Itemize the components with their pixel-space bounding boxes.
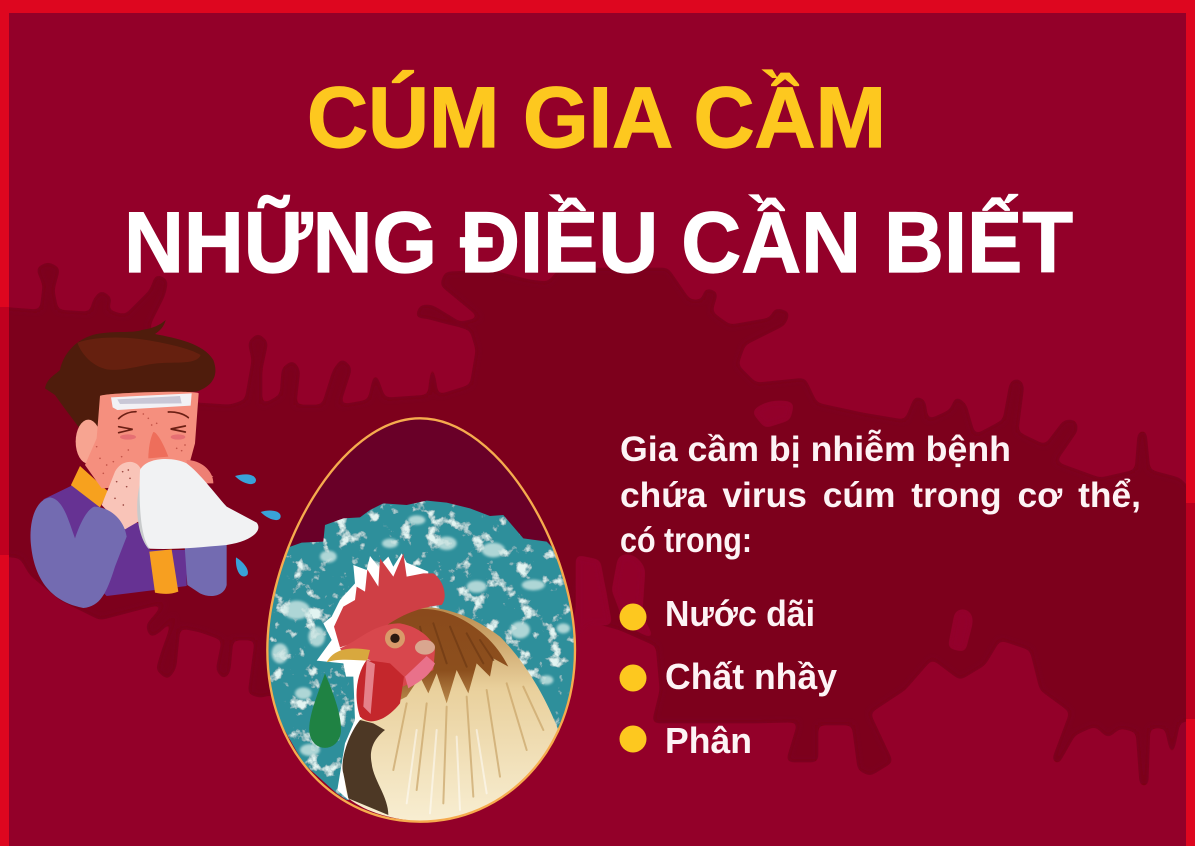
face	[85, 392, 213, 488]
bullet 3: Phân	[665, 720, 752, 761]
bullet dot 2	[620, 664, 646, 692]
eyebrows and closed eyes	[119, 412, 188, 433]
bullet 1: Nước dãi	[665, 593, 815, 634]
sneeze droplets	[235, 474, 281, 576]
rooster neck feathers	[380, 609, 508, 703]
bullet dot 3	[620, 726, 646, 752]
tissue shadow	[137, 483, 160, 549]
rooster chest feathers	[345, 607, 558, 822]
light lobes over dark virus	[576, 401, 973, 652]
eye	[385, 628, 405, 648]
tissue	[140, 459, 258, 549]
ear lobe	[405, 656, 435, 688]
bullet dot 1	[620, 604, 646, 630]
head	[340, 623, 435, 687]
intro line 3: có trong:	[620, 521, 752, 560]
egg border	[267, 418, 575, 822]
title line 2: NHỮNG ĐIỀU CẦN BIẾT	[124, 195, 1073, 291]
headband	[111, 393, 192, 410]
freckles	[96, 413, 186, 474]
egg backdrop	[267, 418, 575, 822]
title line 1: CÚM GIA CẦM	[307, 70, 886, 166]
ear patch	[415, 640, 435, 655]
comb	[334, 553, 445, 647]
wattle highlight	[363, 660, 375, 714]
intro line 2: chứa virus cúm trong cơ thể,	[620, 476, 1141, 515]
pupil	[390, 634, 400, 643]
feather strokes	[393, 623, 543, 813]
egg with rooster and virus	[260, 418, 580, 823]
scarf end	[149, 549, 178, 594]
illustration: sneezing man	[30, 320, 281, 608]
dark lower feathers	[342, 720, 388, 815]
bullet 2: Chất nhầy	[665, 656, 837, 697]
green drop	[309, 673, 341, 748]
right sleeve	[184, 542, 227, 596]
cheeks	[120, 434, 136, 440]
scarf collar	[71, 466, 108, 507]
white paper-cut outline	[317, 553, 428, 800]
intro text	[620, 429, 1141, 560]
wattle	[357, 660, 404, 721]
border tint in dark zone	[0, 307, 9, 555]
near hand	[102, 462, 142, 529]
beak	[327, 649, 370, 662]
ear	[76, 420, 101, 464]
man hair	[45, 320, 215, 435]
headband shade	[117, 396, 182, 404]
background virus silhouettes	[0, 262, 1195, 786]
intro line 1: Gia cầm bị nhiễm bệnh	[620, 429, 1011, 469]
hand freckles	[114, 469, 131, 506]
virus microscopy disc	[263, 501, 577, 800]
lower egg background	[285, 731, 402, 820]
left sleeve	[30, 497, 127, 608]
bullet list	[620, 593, 837, 761]
hair highlight	[77, 338, 201, 370]
purple jacket	[43, 486, 187, 596]
nose	[148, 432, 168, 458]
pale virus clusters	[272, 515, 570, 756]
far hand	[187, 460, 213, 483]
